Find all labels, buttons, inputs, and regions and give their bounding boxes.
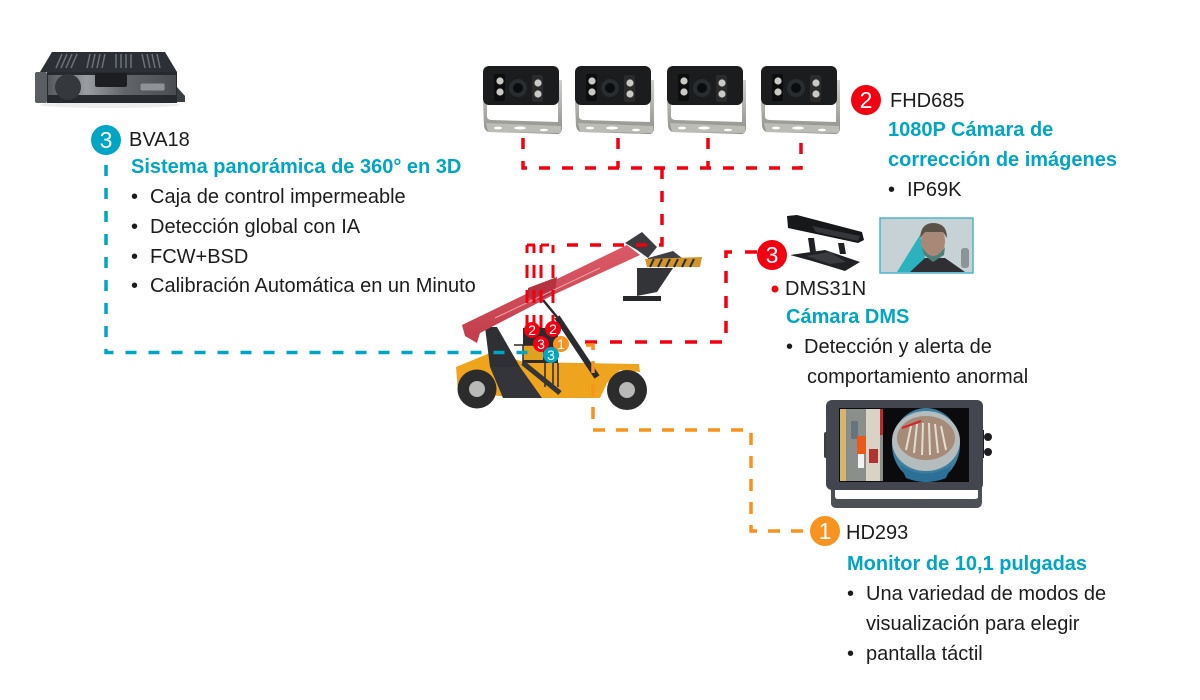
badge: 3 BVA18: 3: [100, 127, 112, 153]
text block: BVA18: [129, 129, 476, 297]
badge: 3 DMS31N: [757, 240, 787, 270]
text block: FHD685: IP69K: [907, 179, 962, 201]
badge: 1 HD293: [810, 516, 840, 546]
text block: HD293: pantalla táctil: [866, 643, 983, 665]
text block: HD293: [846, 522, 1106, 665]
icon: DMS31N camera: [787, 215, 864, 271]
text block: DMS31N: DMS31N: [785, 278, 866, 300]
heading: monitor size: Monitor de 10,1 pulgadas: [847, 553, 1087, 575]
text block: HD293: visualización para elegir: [866, 613, 1080, 635]
text block: HD293: HD293: [846, 522, 908, 544]
illustration: reach stacker: [456, 232, 702, 410]
text block: DMS31N: [772, 278, 1028, 388]
text block: BVA18: •: [131, 275, 138, 297]
badge: 3 BVA18: [91, 125, 121, 155]
text block: BVA18: FCW+BSD: [150, 246, 248, 268]
text block: BVA18: Detección global con IA: [150, 216, 361, 238]
heading: panoramic system: Sistema panorámica de 360° en 3D: [131, 156, 461, 178]
text block: DMS31N: Detección y alerta de: [804, 336, 992, 358]
text block: FHD685: FHD685: [890, 90, 964, 112]
connector: teal dashed line: [106, 165, 533, 352]
icon: HD293 monitor: [824, 400, 992, 508]
badge: 1 HD293: 1: [819, 518, 831, 544]
text block: BVA18: •: [131, 246, 138, 268]
text block: FHD685: [888, 90, 1117, 201]
heading: correction camera: 1080P Cámara de: [888, 119, 1053, 141]
text block: HD293: •: [847, 643, 854, 665]
icon: BVA18 control box: [35, 52, 185, 108]
connector: DMS red dashed line: [572, 252, 757, 342]
text block: DMS31N: comportamiento anormal: [807, 366, 1028, 388]
text block: BVA18: Calibración Automática en un Minuto: [150, 275, 476, 297]
badge: 2 FHD685: 2: [860, 87, 872, 113]
connector: boom red dashed drops: [527, 245, 555, 330]
text block: HD293: Una variedad de modos de: [866, 583, 1106, 605]
connector: camera red dashed lines: [523, 138, 801, 245]
badge: 2 FHD685: [851, 85, 881, 115]
badge: 3 DMS31N: 3: [766, 242, 778, 268]
heading: DMS camera: Cámara DMS: [786, 306, 909, 328]
badges: vehicle markers: 3: [537, 336, 545, 352]
badges: vehicle markers: 3: [547, 347, 555, 363]
badges: vehicle markers: [524, 321, 569, 363]
text block: BVA18: Caja de control impermeable: [150, 186, 406, 208]
connector: orange dashed line: [586, 345, 810, 531]
badges: vehicle markers: 1: [557, 336, 565, 352]
badges: vehicle markers: 2: [528, 322, 536, 338]
image: driver face detection: [880, 218, 973, 273]
icons: four FHD685 cameras: [483, 66, 840, 134]
text block: HD293: •: [847, 583, 854, 605]
text block: DMS31N: •: [786, 336, 793, 358]
badges: vehicle markers: 2: [549, 321, 557, 337]
text block: BVA18: BVA18: [129, 129, 190, 151]
text block: FHD685: corrección de imágenes: [888, 149, 1117, 171]
text block: BVA18: •: [131, 186, 138, 208]
text block: BVA18: •: [131, 216, 138, 238]
text block: FHD685: •: [888, 179, 895, 201]
